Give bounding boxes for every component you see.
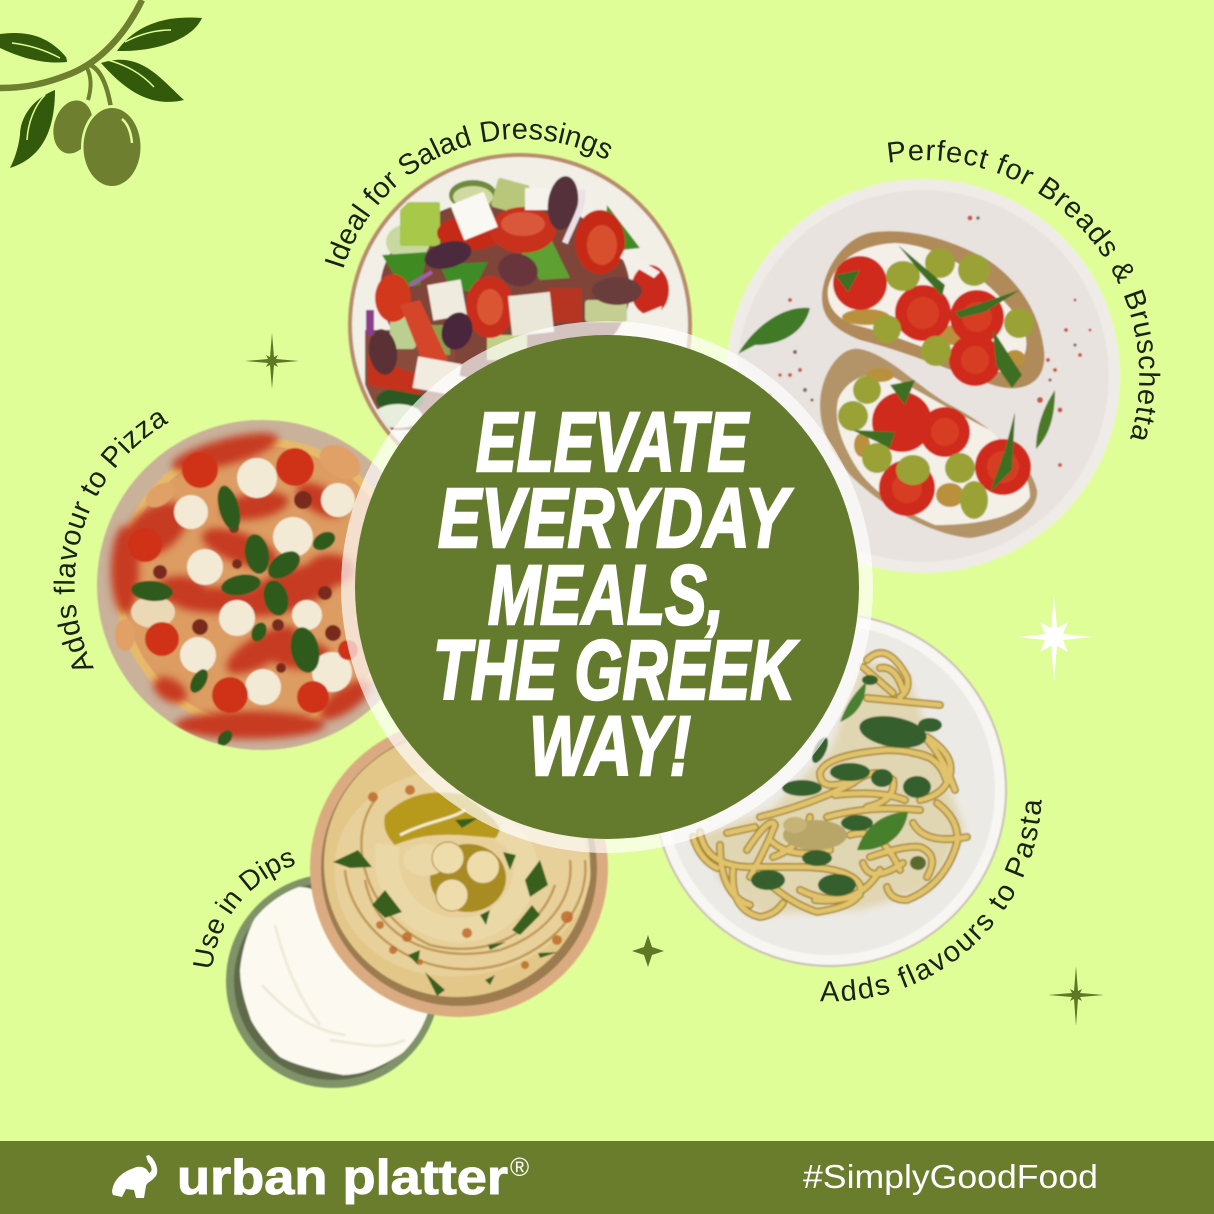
brand name: urban platter [177,1151,508,1205]
icon: olive branch [0,0,202,189]
headline: MEALS, [488,548,724,642]
curved label: pasta: Adds flavours to Pasta [820,800,1042,1002]
sparkle top left [245,333,299,389]
headline [433,395,799,793]
headline: WAY! [529,699,691,793]
photo: pesto pasta plate [653,613,1007,967]
center circle [355,335,859,839]
photo: dip bowl [226,874,440,1088]
headline: THE GREEK [433,623,799,717]
footer bar [0,1141,1214,1214]
photo: bruschetta plate [726,179,1120,573]
curved label: breads: Perfect for Breads & Bruschetta [888,140,1160,440]
photo: greek salad bowl [347,152,693,446]
center halo ring [341,321,873,853]
registered mark: ® [510,1152,529,1182]
curved label: dips: Use in Dips [193,852,295,967]
photo: hummus bowl [310,719,608,1017]
headline: ELEVATE [476,395,750,489]
sparkle white right [1017,595,1092,682]
hashtag: #SimplyGoodFood [803,1158,1098,1195]
curved label: salad: Ideal for Salad Dressings [324,121,612,268]
headline: EVERYDAY [438,471,793,565]
icon: elephant logo [112,1155,157,1198]
curved label: pizza: Adds flavour to Pizza [54,412,169,669]
photo: margherita pizza [96,419,382,751]
sparkle small centre [632,935,664,967]
sparkle bottom right [1048,966,1104,1026]
